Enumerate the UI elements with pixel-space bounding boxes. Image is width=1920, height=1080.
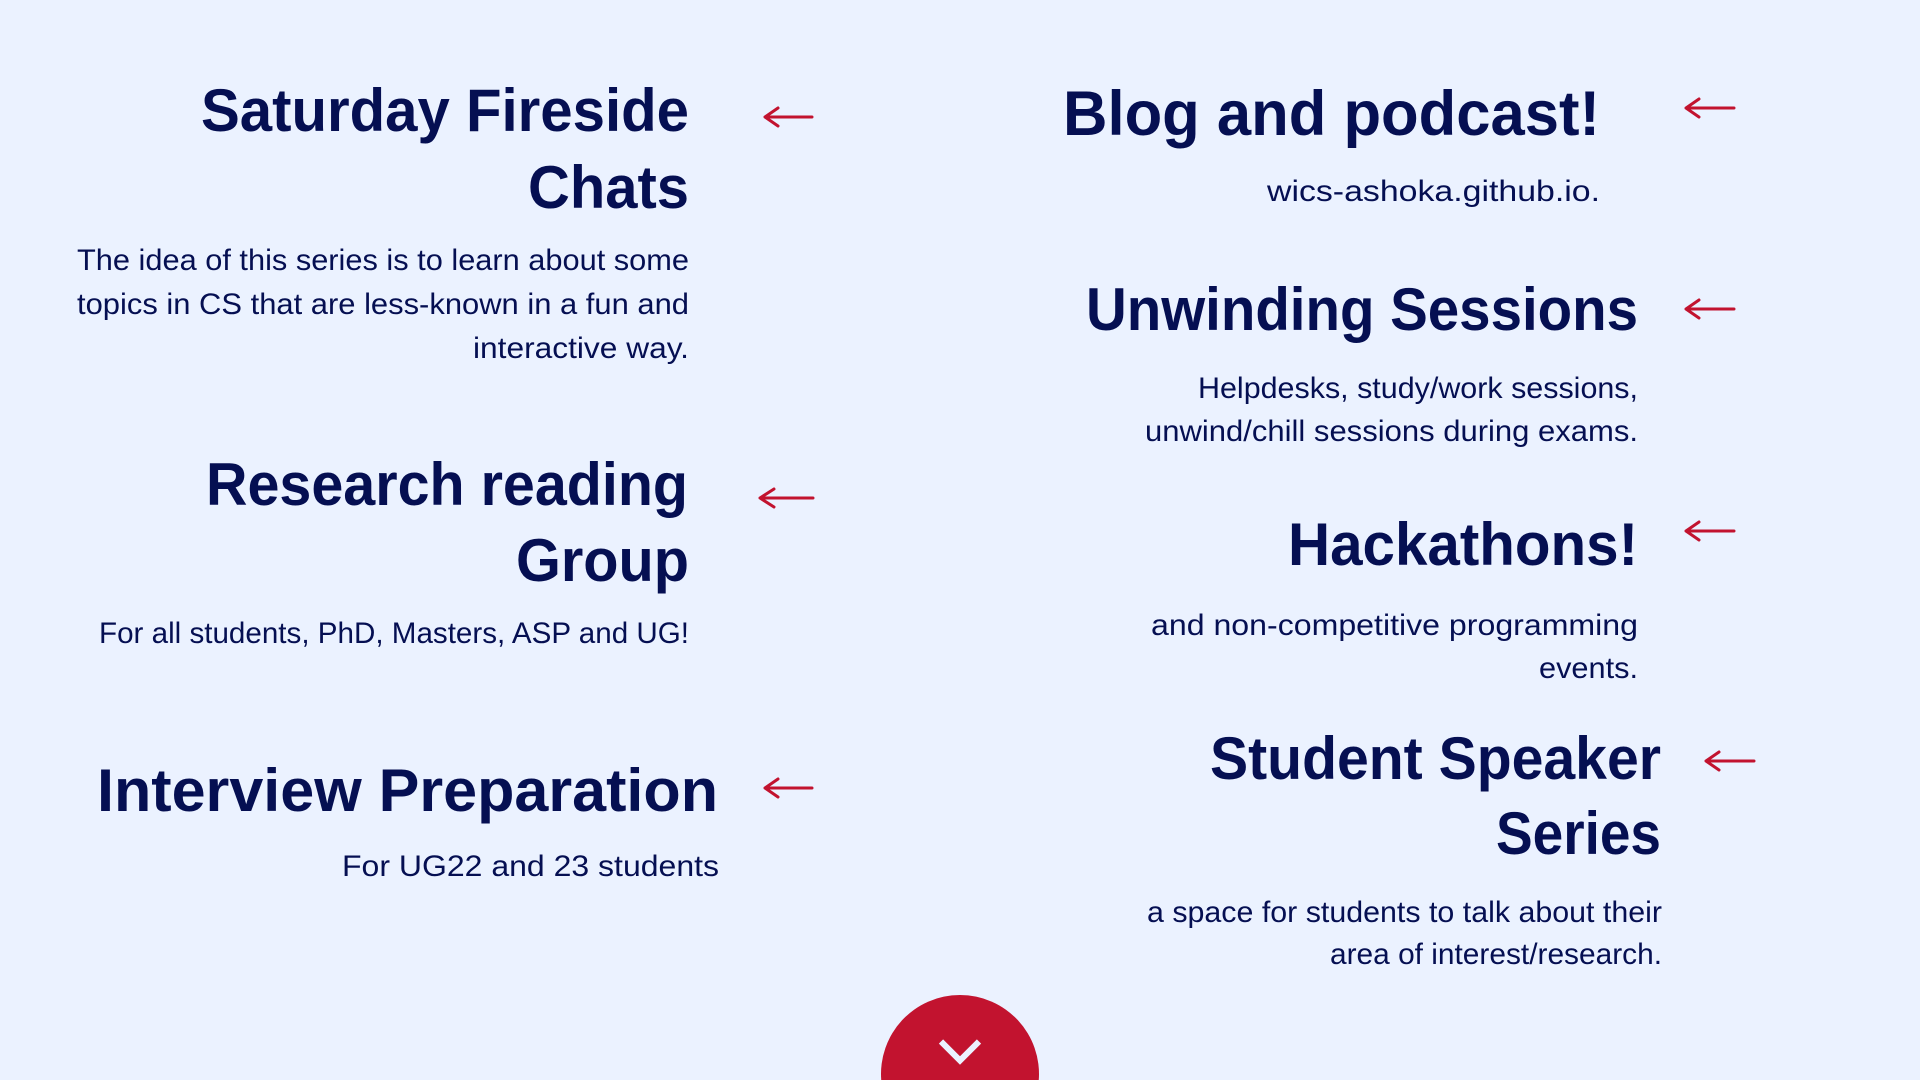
item: Blog and podcast	[1063, 79, 1734, 208]
heading: Hackathons!	[1288, 511, 1638, 578]
heading: Interview Preparation	[97, 757, 718, 824]
heading	[1210, 725, 1661, 867]
heading	[206, 451, 689, 594]
arrow	[1706, 752, 1754, 770]
item: Student Speaker Series	[1147, 725, 1754, 971]
arrow	[765, 779, 812, 797]
arrow	[765, 108, 812, 126]
heading: Unwinding Sessions	[1086, 276, 1638, 343]
description	[1145, 372, 1638, 448]
arrow	[1686, 300, 1734, 318]
heading: Chats	[528, 154, 689, 221]
description: events.	[1539, 652, 1638, 685]
item: Research reading Group	[99, 451, 813, 650]
icon: chevron down	[941, 1042, 979, 1060]
description: Helpdesks, study/work sessions,	[1198, 372, 1638, 405]
description: topics in CS that are less-known in a fun and	[77, 288, 689, 321]
heading	[201, 77, 689, 221]
item: Interview Preparation	[97, 757, 812, 883]
description: interactive way.	[473, 332, 689, 365]
description: area of interest/research.	[1330, 938, 1662, 971]
heading: Research reading	[206, 451, 688, 518]
heading: Saturday Fireside	[201, 77, 689, 144]
description: The idea of this series is to learn about some	[77, 244, 689, 277]
description: wics-ashoka.github.io.	[1266, 175, 1600, 208]
item: Saturday Fireside Chats	[77, 77, 812, 365]
item: Hackathons	[1151, 511, 1734, 685]
arrow	[760, 489, 813, 507]
description	[77, 244, 689, 365]
description: unwind/chill sessions during exams.	[1145, 415, 1638, 448]
description	[1151, 609, 1638, 685]
arrow	[1686, 99, 1734, 117]
description: a space for students to talk about their	[1147, 896, 1662, 929]
heading: Blog and podcast!	[1063, 79, 1600, 149]
description: and non-competitive programming	[1151, 609, 1638, 642]
description: For UG22 and 23 students	[342, 850, 719, 883]
item: Unwinding Sessions	[1086, 276, 1734, 448]
description	[1147, 896, 1662, 971]
heading: Group	[516, 527, 689, 594]
scroll down button	[881, 995, 1039, 1080]
heading: Student Speaker	[1210, 725, 1661, 792]
heading: Series	[1496, 800, 1661, 867]
arrow	[1686, 522, 1734, 540]
description: For all students, PhD, Masters, ASP and UG!	[99, 617, 689, 650]
